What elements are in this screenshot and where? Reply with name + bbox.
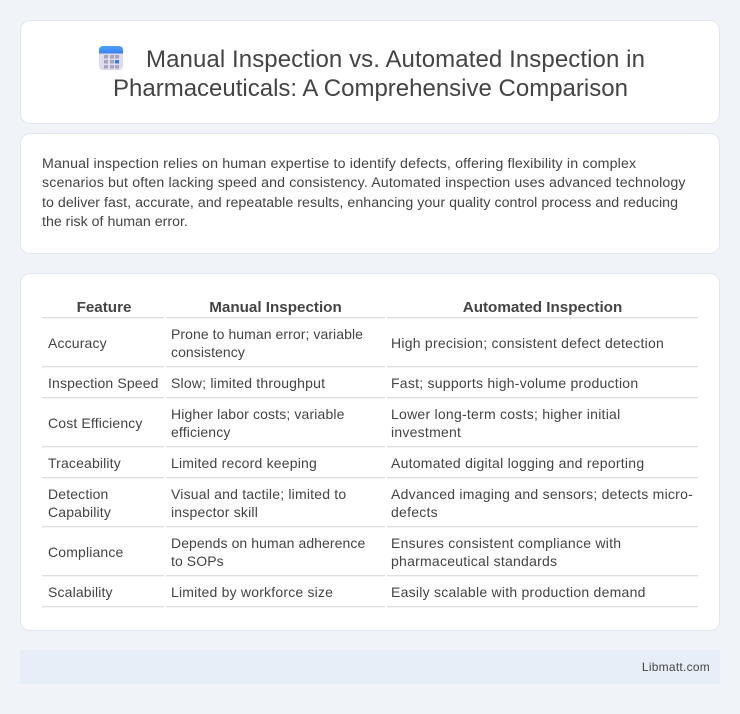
title card xyxy=(20,20,720,124)
comparison table: Lower long-term costs; higher initial xyxy=(391,406,620,422)
comparison table: Detection xyxy=(48,486,108,502)
comparison table: consistency xyxy=(171,344,245,360)
comparison table: High precision; consistent defect detection xyxy=(391,335,664,351)
comparison table: Advanced imaging and sensors; detects micro- xyxy=(391,486,693,502)
comparison table: Easily scalable with production demand xyxy=(391,584,646,600)
comparison table: to SOPs xyxy=(171,553,224,569)
comparison table: efficiency xyxy=(171,424,231,440)
comparison table: Fast; supports high-volume production xyxy=(391,375,638,391)
comparison table: Slow; limited throughput xyxy=(171,375,325,391)
comparison table: Ensures consistent compliance with xyxy=(391,535,621,551)
comparison table: Prone to human error; variable xyxy=(171,326,363,342)
intro text: scenarios but often lacking speed and consistency. Automated inspection uses advanced technology xyxy=(42,175,686,191)
comparison table: investment xyxy=(391,424,461,440)
comparison table: pharmaceutical standards xyxy=(391,553,557,569)
comparison table: defects xyxy=(391,504,438,520)
intro text: to deliver fast, accurate, and repeatable results, enhancing your quality control process and reducing xyxy=(42,195,678,211)
intro text: Manual inspection relies on human expertise to identify defects, offering flexibility in complex xyxy=(42,156,636,172)
intro text xyxy=(42,156,686,230)
comparison table: Manual Inspection xyxy=(209,299,342,316)
intro text: the risk of human error. xyxy=(42,214,188,230)
comparison table: Accuracy xyxy=(48,335,107,351)
icon: calendar xyxy=(99,46,123,70)
comparison table: Visual and tactile; limited to xyxy=(171,486,346,502)
comparison table: Cost Efficiency xyxy=(48,415,143,431)
comparison table: Capability xyxy=(48,504,111,520)
title: Pharmaceuticals: A Comprehensive Comparison xyxy=(113,75,628,102)
footer xyxy=(20,650,720,684)
comparison table: Automated Inspection xyxy=(463,299,622,316)
intro card xyxy=(20,133,720,254)
comparison table: Higher labor costs; variable xyxy=(171,406,345,422)
comparison table: Automated digital logging and reporting xyxy=(391,455,644,471)
comparison table: Limited by workforce size xyxy=(171,584,333,600)
comparison table: Inspection Speed xyxy=(48,375,159,391)
comparison table: Scalability xyxy=(48,584,113,600)
comparison table: Traceability xyxy=(48,455,121,471)
comparison table xyxy=(42,299,698,608)
footer: Libmatt.com xyxy=(642,660,710,674)
comparison table: Limited record keeping xyxy=(171,455,317,471)
comparison table: Feature xyxy=(77,299,131,316)
title xyxy=(113,46,645,102)
comparison table: Compliance xyxy=(48,544,123,560)
comparison table: inspector skill xyxy=(171,504,258,520)
table card xyxy=(20,273,720,631)
title: Manual Inspection vs. Automated Inspection in xyxy=(146,46,645,73)
comparison table: Depends on human adherence xyxy=(171,535,365,551)
